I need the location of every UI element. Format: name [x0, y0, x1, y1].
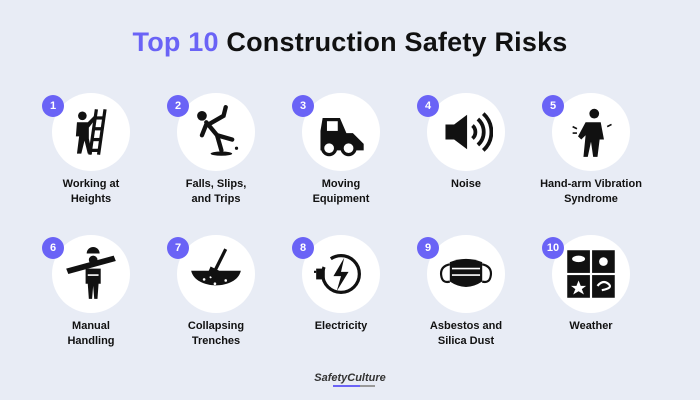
item 6: manual handling: Handling: [67, 335, 115, 347]
icon: worker carrying beam: [66, 247, 116, 299]
item 4: noise: Noise: [451, 178, 481, 190]
item 10: weather: 10: [547, 242, 559, 254]
item 6: manual handling: [42, 235, 130, 347]
item 7: collapsing trenches: Trenches: [192, 335, 240, 347]
item 7: collapsing trenches: Collapsing: [188, 320, 244, 332]
item 8: electricity: 8: [300, 242, 306, 254]
item 2: falls slips trips: Falls, Slips,: [186, 178, 246, 190]
item 4: noise: 4: [425, 100, 431, 112]
item 8: electricity: [292, 235, 380, 332]
item 7: collapsing trenches: 7: [175, 242, 181, 254]
item 1: working at heights: Heights: [71, 193, 111, 205]
icon: speaker: [445, 112, 493, 152]
item 8: electricity: Electricity: [315, 320, 367, 332]
item 7: collapsing trenches: [167, 235, 255, 347]
item 2: falls slips trips: 2: [175, 100, 181, 112]
item 9: asbestos silica dust: Asbestos and: [430, 320, 502, 332]
item 1: working at heights: Working at: [63, 178, 119, 190]
icon: person holding arm: [572, 108, 612, 157]
title: Top 10 Construction Safety Risks: [132, 27, 568, 57]
logo: SafetyCulture: [314, 372, 386, 384]
item 5: hand-arm vibration: 5: [550, 100, 556, 112]
item 5: hand-arm vibration: Hand-arm Vibration: [540, 178, 642, 190]
item 6: manual handling: 6: [50, 242, 56, 254]
icon: skid loader: [320, 118, 364, 156]
item 1: working at heights: [42, 93, 130, 205]
icon: weather tiles: [567, 250, 615, 298]
item 3: moving equipment: Moving: [322, 178, 360, 190]
item 1: working at heights: 1: [50, 100, 56, 112]
item 4: noise: [417, 93, 505, 190]
icon: climber on ladder: [76, 109, 107, 155]
item 10: weather: Weather: [569, 320, 613, 332]
item 6: manual handling: Manual: [72, 320, 110, 332]
item 9: asbestos silica dust: [417, 235, 505, 347]
icon: face mask: [440, 258, 492, 287]
item 2: falls slips trips: and Trips: [192, 193, 240, 205]
item 5: hand-arm vibration: Syndrome: [564, 193, 618, 205]
item 3: moving equipment: Equipment: [313, 193, 369, 205]
item 9: asbestos silica dust: Silica Dust: [438, 335, 494, 347]
item 9: asbestos silica dust: 9: [425, 242, 431, 254]
icon: trench with shovel: [191, 248, 241, 286]
icon: slipping person: [197, 105, 238, 156]
item 3: moving equipment: 3: [300, 100, 306, 112]
item 10: weather: [542, 235, 630, 332]
icon: plug and bolt: [314, 254, 361, 294]
item 5: hand-arm vibration: [540, 93, 642, 205]
item 2: falls slips trips: [167, 93, 255, 205]
item 3: moving equipment: [292, 93, 380, 205]
